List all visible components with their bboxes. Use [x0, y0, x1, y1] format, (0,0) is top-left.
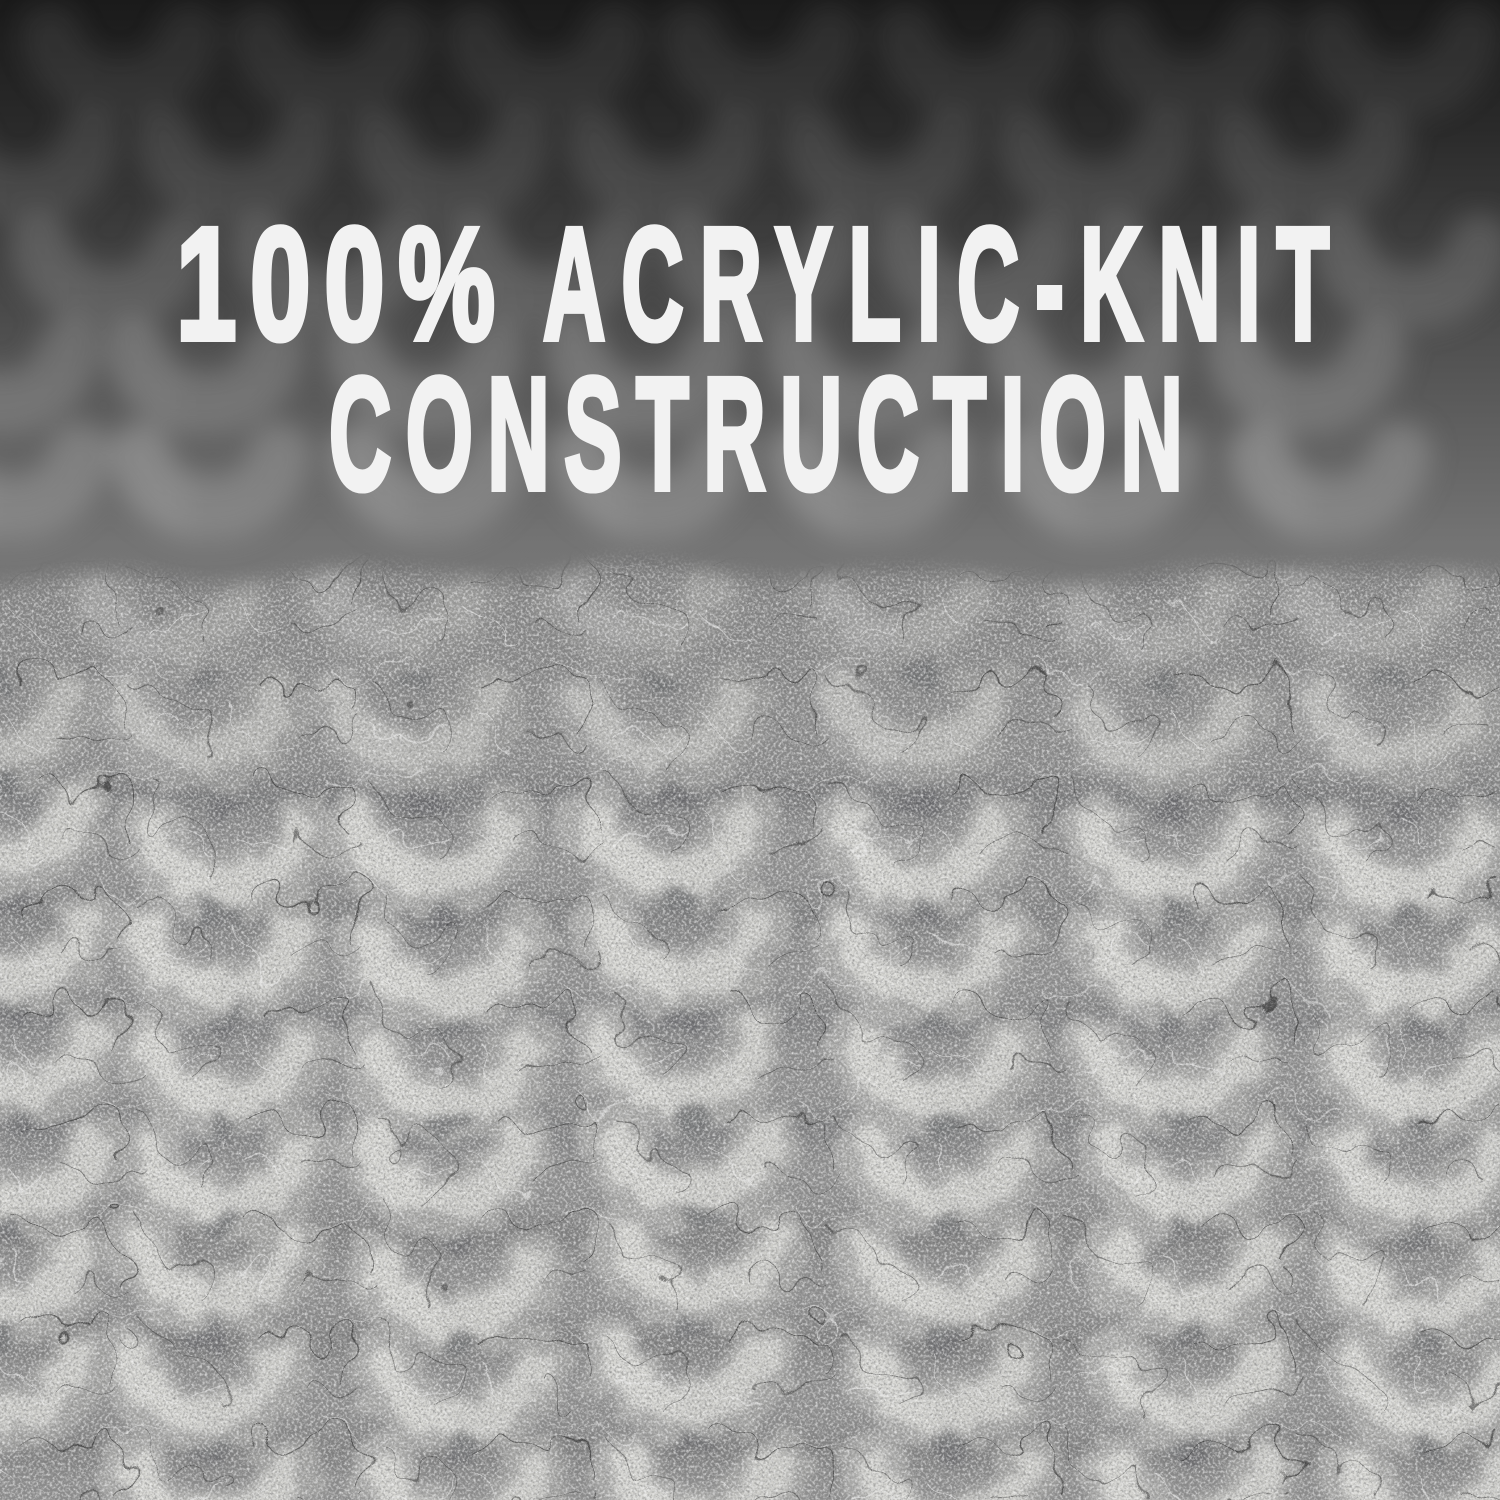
knit fabric: foreground — [0, 552, 1500, 1500]
title line 1: ACRYLIC-KNIT — [543, 196, 1345, 374]
title line 1 — [176, 194, 1345, 374]
title line 2: CONSTRUCTION — [329, 346, 1197, 524]
title line 1: 100% — [176, 194, 509, 373]
blurred knit background: top — [0, 0, 1500, 640]
title: 100% acrylic-knit construction — [176, 194, 1345, 524]
